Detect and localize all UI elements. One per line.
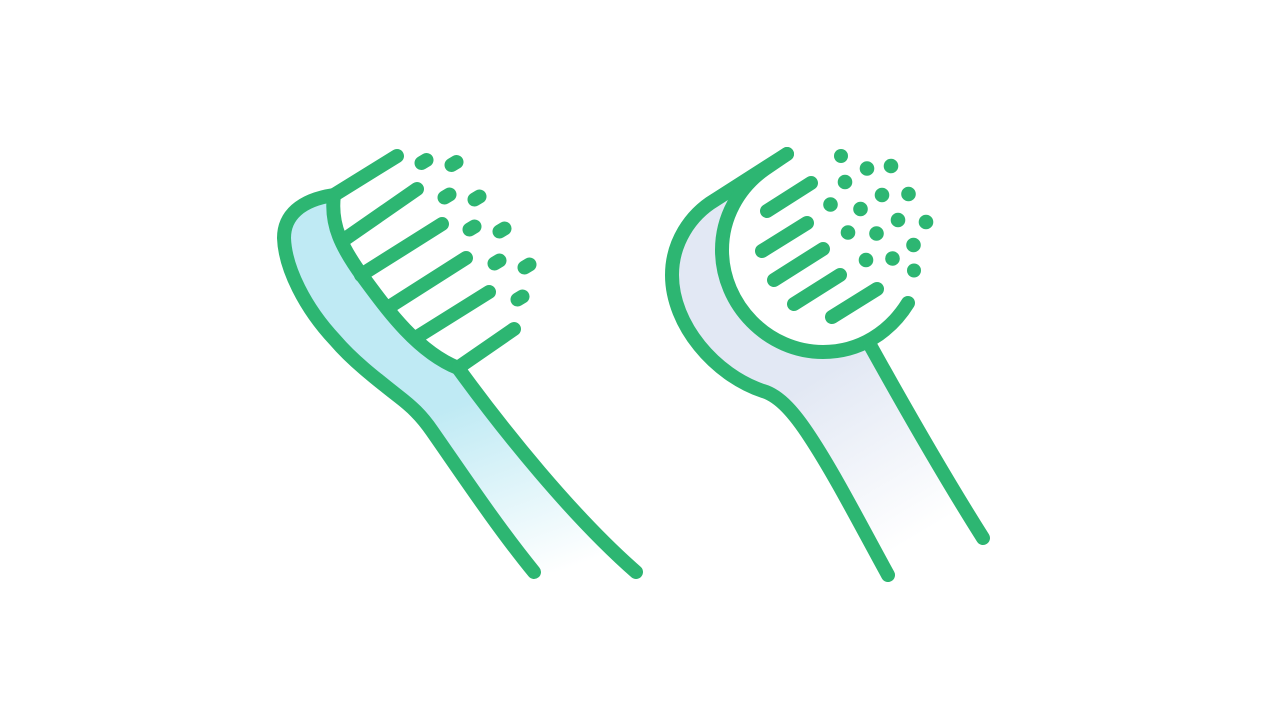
left brush fill [284, 195, 636, 572]
right brush bristle dots [823, 149, 933, 278]
left brush bristle tips [422, 160, 530, 300]
toothbrush: left, side view [284, 156, 636, 572]
toothbrush: right, top view [672, 149, 983, 575]
left brush head edge [333, 195, 458, 368]
right brush head circle [722, 154, 908, 352]
right brush bristle bars [762, 183, 877, 317]
left brush outline [284, 195, 534, 572]
left brush bristles [334, 156, 514, 367]
right brush fill [672, 181, 983, 575]
right brush outline [672, 154, 888, 575]
left brush handle edge [458, 368, 636, 572]
right brush handle edge [870, 345, 983, 538]
